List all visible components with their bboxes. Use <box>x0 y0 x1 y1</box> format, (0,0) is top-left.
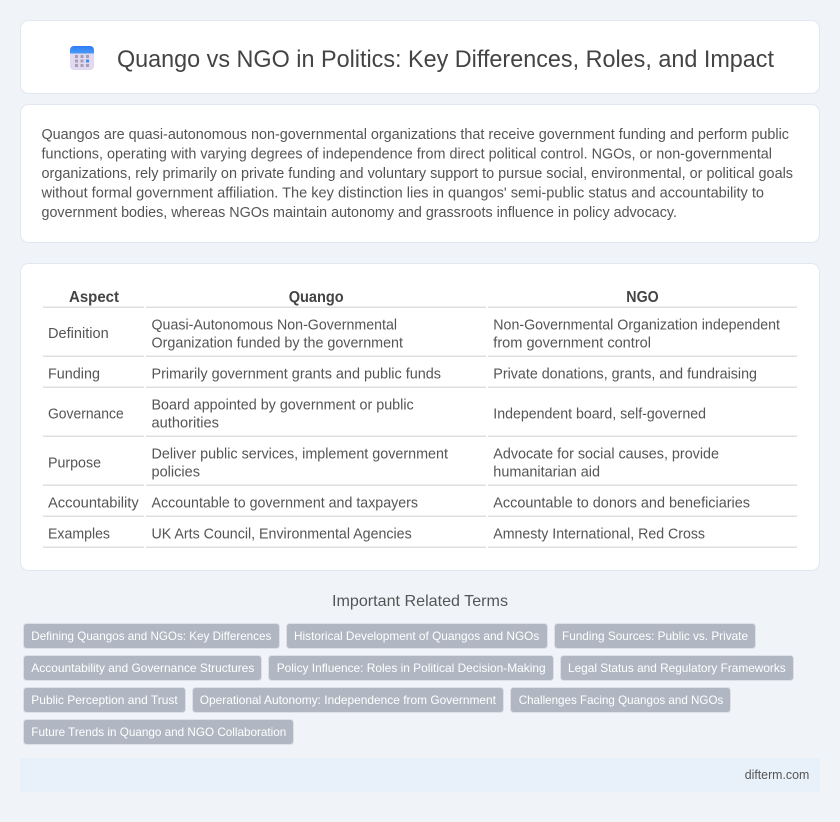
row: accountability: Accountable to government and taxpayers <box>152 495 418 511</box>
row: funding: Private donations, grants, and fundraising <box>493 366 757 382</box>
row: examples <box>48 526 705 542</box>
row: definition: from government control <box>493 335 651 351</box>
text block: intro: government bodies, whereas NGOs maintain autonomy and grassroots influence in policy advocacy. <box>42 205 677 221</box>
text block: intro: organizations, rely primarily on private funding and voluntary support to pursue social, environmental, or political goals <box>42 166 793 182</box>
tag labels: Operational Autonomy: Independence from Government <box>200 693 497 707</box>
panel: intro paragraph <box>20 104 820 242</box>
row: definition: Quasi-Autonomous Non-Governmental <box>152 317 397 333</box>
text block: intro: functions, operating with varying degrees of independence from direct political control. NGOs, or non-governmental <box>42 146 772 162</box>
table header row: Quango <box>289 289 344 306</box>
row: purpose: Deliver public services, implement government <box>152 446 448 462</box>
header card <box>20 20 820 94</box>
row: accountability: Accountability <box>48 495 140 511</box>
row: definition: Definition <box>48 326 109 342</box>
row: funding <box>48 366 757 382</box>
row: examples: Examples <box>48 526 110 542</box>
tag labels: Future Trends in Quango and NGO Collaboration <box>31 725 286 739</box>
row: purpose: humanitarian aid <box>493 464 600 480</box>
row: definition <box>48 317 780 351</box>
row: funding: Primarily government grants and public funds <box>152 366 441 382</box>
row: purpose <box>48 446 719 480</box>
row: purpose: Purpose <box>48 455 101 471</box>
tag labels: Challenges Facing Quangos and NGOs <box>519 693 723 707</box>
footer brand text: difterm.com <box>745 767 809 782</box>
tag labels: Historical Development of Quangos and NGOs <box>294 629 539 643</box>
row: purpose: Advocate for social causes, provide <box>493 446 719 462</box>
panel: related term tags <box>24 624 794 744</box>
tag labels <box>31 629 786 739</box>
text block: intro: without formal government affiliation. The key distinction lies in quangos' semi-public status and accountability to <box>40 186 764 202</box>
row: accountability: Accountable to donors and beneficiaries <box>493 495 750 511</box>
table header row: Aspect <box>69 289 120 306</box>
tag labels: Accountability and Governance Structures <box>31 661 254 675</box>
tag labels: Legal Status and Regulatory Frameworks <box>568 661 786 675</box>
row: funding: Funding <box>48 366 100 382</box>
row: examples: Amnesty International, Red Cross <box>493 526 705 542</box>
footer bar <box>20 758 820 792</box>
row: purpose: policies <box>152 464 200 480</box>
row: governance: Board appointed by government or public <box>152 397 414 413</box>
tag labels: Public Perception and Trust <box>31 693 178 707</box>
tag labels: Policy Influence: Roles in Political Decision-Making <box>277 661 546 675</box>
row: definition: Non-Governmental Organization independent <box>493 317 780 333</box>
row: accountability <box>48 495 750 511</box>
row: examples: UK Arts Council, Environmental Agencies <box>152 526 412 542</box>
table header row: NGO <box>626 289 659 306</box>
row: governance: Governance <box>48 406 124 422</box>
row: governance: authorities <box>152 415 219 431</box>
tag labels: Funding Sources: Public vs. Private <box>562 629 748 643</box>
text block: intro: Quangos are quasi-autonomous non-governmental organizations that receive government funding and perform public <box>42 127 789 143</box>
row: definition: Organization funded by the government <box>152 335 403 351</box>
row: governance: Independent board, self-governed <box>493 406 706 422</box>
text block: intro <box>40 127 793 221</box>
panel: comparison table <box>20 264 820 570</box>
table header row <box>69 289 659 306</box>
tag labels: Defining Quangos and NGOs: Key Differences <box>31 629 271 643</box>
heading: related terms: Important Related Terms <box>332 593 508 610</box>
title: Quango vs NGO in Politics: Key Differences, Roles, and Impact <box>117 46 774 73</box>
row: governance <box>48 397 706 431</box>
icon: calendar grid <box>70 46 94 70</box>
